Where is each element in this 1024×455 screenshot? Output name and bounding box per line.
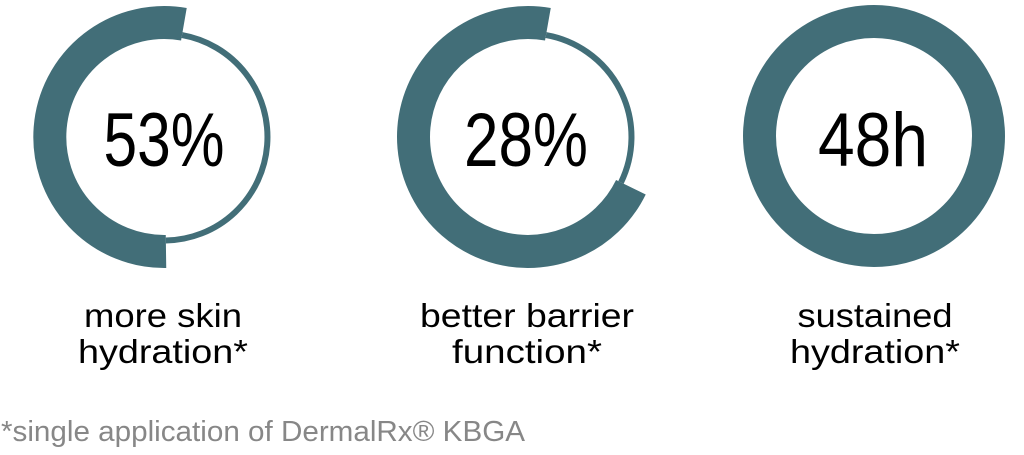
stat: 53%: 53% xyxy=(104,98,224,183)
footnote: *single application of DermalRx® KBGA xyxy=(1,416,526,448)
donut: 53% xyxy=(50,23,267,252)
stat: 48h: 48h xyxy=(818,98,928,183)
label: more skin hydration xyxy=(78,297,248,370)
donut: 28% xyxy=(414,22,631,251)
label: better barrier function: function* xyxy=(452,333,602,370)
label: better barrier function: better barrier xyxy=(420,297,634,334)
label: sustained hydration: sustained xyxy=(798,297,952,334)
stat: 28%: 28% xyxy=(464,98,588,183)
label: sustained hydration xyxy=(790,297,960,370)
label: more skin hydration: hydration* xyxy=(78,333,248,370)
label: sustained hydration: hydration* xyxy=(790,333,960,370)
label: better barrier function xyxy=(420,297,634,370)
donut: 48h xyxy=(760,22,988,250)
label: more skin hydration: more skin xyxy=(84,297,242,334)
